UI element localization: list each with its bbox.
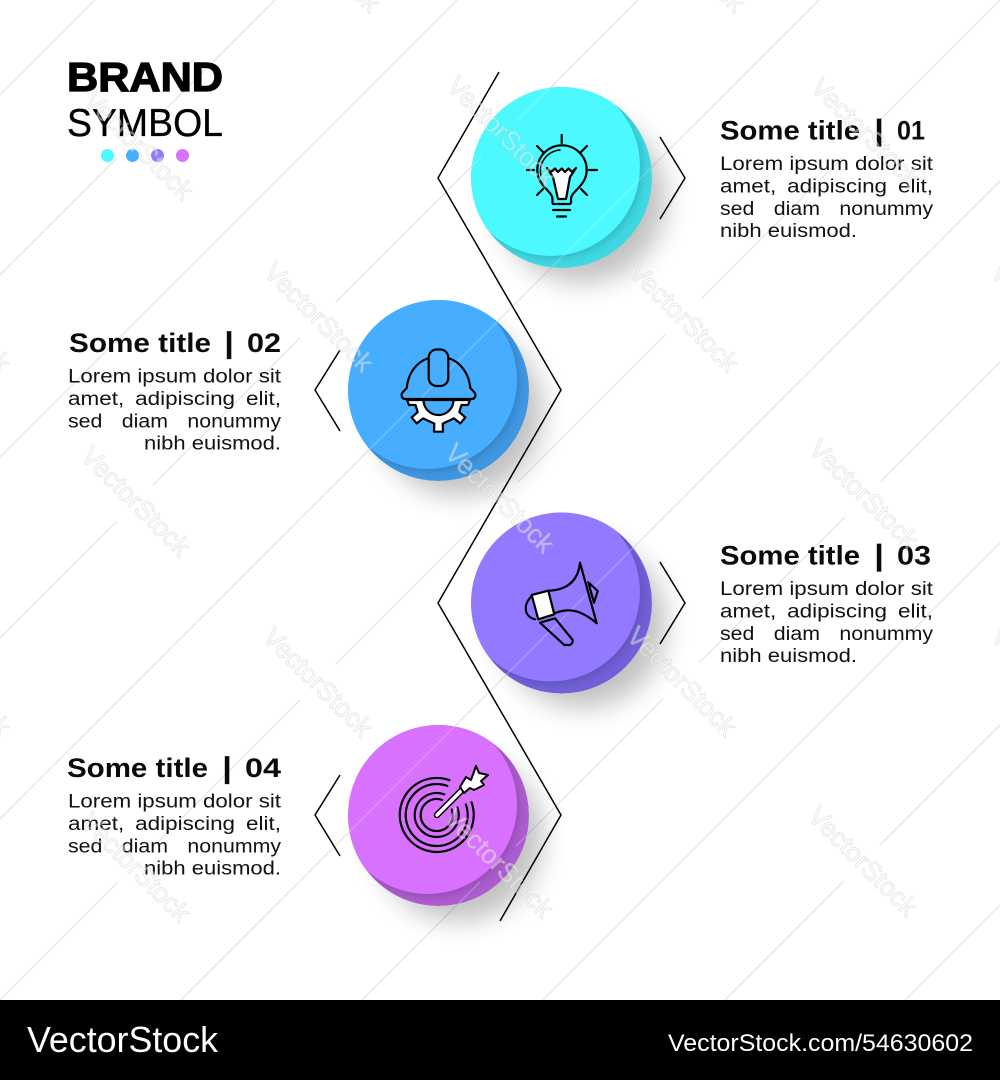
body 3: Lorem ipsum dolor sit	[720, 579, 934, 600]
text block 3	[720, 540, 934, 667]
body 1: Lorem ipsum dolor sit	[720, 154, 934, 175]
watermark text tiles: VectorStock	[621, 621, 743, 742]
body 3	[720, 579, 934, 667]
body 1: amet, adipiscing elit,	[720, 176, 933, 198]
watermark text tiles: VectorStock	[257, 622, 379, 743]
body 4: Lorem ipsum dolor sit	[68, 792, 282, 812]
icon: hard hat and gear	[402, 350, 475, 432]
title 2: 02	[247, 328, 281, 358]
body 2: Lorem ipsum dolor sit	[68, 366, 282, 388]
title 1: Some title	[720, 116, 860, 146]
title 1: 01	[897, 116, 925, 146]
body 4: sed diam nonummy	[68, 836, 282, 858]
watermark text tiles: VectorStock	[78, 85, 200, 206]
icon: megaphone	[526, 563, 598, 645]
text block 4	[67, 752, 282, 880]
watermark text tiles: VectorStock	[438, 803, 560, 924]
body 2: nibh euismod.	[144, 434, 281, 454]
watermark text tiles: VectorStock	[75, 807, 197, 928]
title 4: |	[223, 752, 231, 784]
arrow bracket 2	[315, 350, 340, 431]
watermark text tiles: VectorStock	[441, 71, 563, 192]
drop shadows under circles	[375, 115, 666, 921]
body 3: amet, adipiscing elit,	[720, 602, 933, 622]
brand logo	[67, 54, 223, 162]
step 4 circle	[348, 725, 529, 906]
arrow bracket 3	[660, 562, 685, 644]
text block 1	[720, 115, 934, 242]
watermark text tiles: VectorStock	[802, 801, 924, 922]
watermark text tiles: VectorStock	[805, 72, 927, 193]
title 4: Some title	[67, 753, 208, 783]
brand word: BRAND	[67, 54, 223, 100]
footer logo text: VectorStock	[27, 1019, 219, 1060]
title 2	[69, 328, 281, 360]
body 3: nibh euismod.	[720, 646, 857, 667]
symbol word: SYMBOL	[67, 102, 223, 145]
zigzag connector line	[438, 72, 561, 921]
text block 2	[68, 328, 282, 454]
step 3 circle	[471, 512, 652, 694]
body 2	[68, 366, 282, 454]
title 4	[67, 752, 281, 784]
title 1: |	[875, 115, 883, 147]
watermark text tiles: VectorStock	[75, 441, 197, 562]
body 1	[720, 154, 934, 242]
icon: light bulb	[527, 135, 597, 216]
title 4: 04	[245, 753, 281, 783]
title 3: Some title	[720, 540, 860, 570]
title 3: |	[875, 540, 883, 572]
body 4: amet, adipiscing elit,	[68, 814, 281, 835]
body 3: sed diam nonummy	[720, 624, 934, 645]
title 2: |	[225, 328, 233, 360]
footer url: VectorStock.com/54630602	[668, 1030, 973, 1057]
title 3	[720, 540, 931, 572]
body 2: sed diam nonummy	[68, 412, 282, 432]
arrow bracket 1	[660, 137, 685, 219]
watermark text tiles: VectorStock	[439, 438, 561, 559]
watermark text tiles: VectorStock	[803, 434, 925, 555]
pattern lines over circles	[350, 88, 652, 904]
title 1	[720, 115, 925, 147]
footer bar	[0, 1000, 1000, 1080]
watermark text tiles: VectorStock	[258, 257, 380, 378]
arrow bracket 4	[315, 775, 340, 856]
title 2: Some title	[69, 328, 211, 358]
body 1: sed diam nonummy	[720, 199, 934, 220]
body 1: nibh euismod.	[720, 221, 857, 242]
step 1 circle	[471, 87, 652, 268]
body 2: amet, adipiscing elit,	[68, 389, 281, 410]
body 4: nibh euismod.	[144, 858, 281, 880]
title 3: 03	[897, 540, 931, 570]
watermark text tiles: VectorStock	[623, 257, 745, 378]
body 4	[68, 792, 282, 880]
step 2 circle	[348, 300, 529, 481]
brand colour dots	[101, 149, 189, 162]
icon: target with arrow	[400, 766, 488, 852]
